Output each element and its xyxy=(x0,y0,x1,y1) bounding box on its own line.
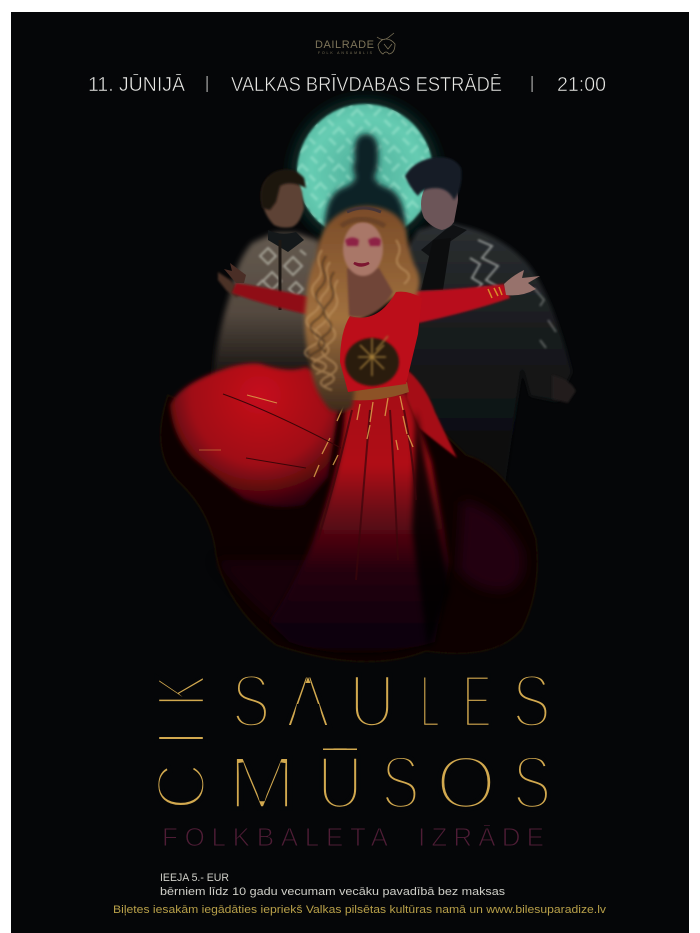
subtitle: folk ballet performance: FOLKBALETA xyxy=(162,822,389,852)
title: SAULES xyxy=(232,659,551,744)
title: CIK (rotated) xyxy=(142,674,221,811)
woman's neck and face xyxy=(341,208,393,317)
title: CIK (rotated): K xyxy=(142,674,220,707)
admission text: bērniem līdz 10 gadu vecumam vecāku pavadībā bez maksas xyxy=(160,886,506,898)
man on the left xyxy=(212,169,320,461)
logo: Dailrade xyxy=(315,33,395,55)
title: CIK (rotated): C xyxy=(142,762,220,811)
title: MŪSOS: S xyxy=(381,741,420,825)
event details line xyxy=(88,73,606,96)
title: MŪSOS: O xyxy=(436,742,496,825)
title: SAULES: U xyxy=(349,659,395,743)
title: SAULES: S xyxy=(512,660,551,744)
woman's long hair xyxy=(305,206,420,412)
title: MŪSOS: M xyxy=(228,741,296,825)
man on the right xyxy=(400,157,576,510)
event details line: 21:00 xyxy=(557,74,606,96)
photo: three dancers xyxy=(161,98,576,662)
ticket information: Biļetes iesakām iegādāties iepriekš Valkas pilsētas kultūras namā un www.bilesuparadize.lv xyxy=(113,904,607,916)
admission text xyxy=(160,872,506,898)
event details line: VALKAS BRĪVDABAS ESTRĀDĒ xyxy=(231,73,502,96)
woman's bodice xyxy=(340,292,422,392)
event details line: 11. JŪNIJĀ xyxy=(88,73,186,96)
title: SAULES: A xyxy=(286,660,331,744)
glowing teal disc with shadow figure xyxy=(291,98,439,246)
title: SAULES: S xyxy=(232,660,270,744)
title: SAULES: L xyxy=(420,660,440,744)
title: MŪSOS xyxy=(228,741,551,825)
dim outer skirt xyxy=(161,395,537,662)
subtitle: folk ballet performance: IZRĀDE xyxy=(418,822,544,852)
logo: Dailrade: DAILRADE xyxy=(315,39,374,51)
title: SAULES: E xyxy=(462,660,492,744)
title: MŪSOS: Ū xyxy=(317,741,363,825)
title: CIK (rotated): I xyxy=(143,729,221,747)
title: MŪSOS: S xyxy=(513,741,551,825)
woman's arms xyxy=(224,263,540,324)
logo: Dailrade: FOLK ANSAMBLIS xyxy=(318,51,373,55)
gold waist belt xyxy=(349,382,409,400)
red skirt xyxy=(170,363,457,654)
admission text: IEEJA 5.- EUR xyxy=(160,872,229,884)
subtitle: folk ballet performance xyxy=(162,822,544,852)
